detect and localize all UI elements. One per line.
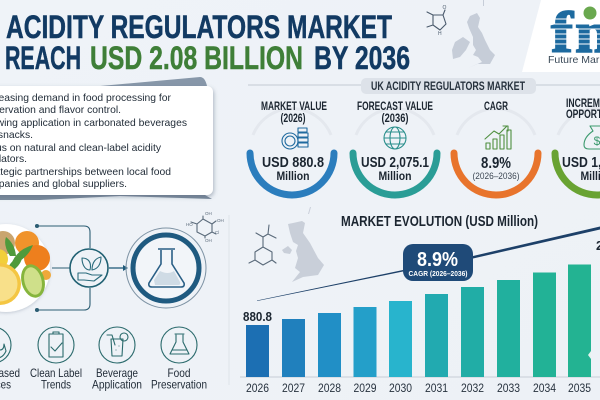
year labels: 2032 — [461, 383, 484, 395]
bar value labels — [243, 239, 600, 324]
bar chart — [240, 239, 600, 395]
year labels: 2030 — [389, 383, 412, 395]
KPI: forecast value: USD 2,075.1 — [361, 155, 429, 171]
title: BY 2036 — [314, 40, 410, 76]
icon: flask circle — [126, 228, 206, 308]
year labels: 2031 — [425, 383, 448, 395]
CAGR callout: CAGR (2026–2036) — [408, 269, 468, 278]
title: USD 2.08 BILLION — [90, 40, 303, 76]
icon labels: Trends — [41, 378, 71, 392]
KPI: forecast value: Million — [378, 171, 412, 183]
chart title: MARKET EVOLUTION (USD Million) — [341, 213, 538, 230]
icon: molecule left — [186, 211, 224, 243]
icon labels: Preservation — [151, 378, 207, 392]
icon: UK map chart — [282, 207, 324, 282]
KPI: CAGR — [454, 101, 538, 195]
divider — [228, 215, 230, 385]
KPI: market value: USD 880.8 — [262, 155, 324, 171]
year labels — [246, 383, 591, 395]
year labels: 2026 — [246, 383, 269, 395]
icon: UK map top — [452, 0, 495, 68]
year labels: 2035 — [568, 383, 591, 395]
title: ACIDITY REGULATORS MARKET — [6, 9, 392, 45]
icon: growth chart — [485, 126, 511, 149]
fruit image — [0, 224, 51, 312]
icon: coins — [282, 128, 308, 149]
icon: molecule left: OH — [205, 238, 212, 243]
KPI: market value — [250, 101, 334, 195]
icon: hand with plant — [70, 249, 108, 287]
icon: molecule left: Cl — [215, 230, 219, 235]
logo — [522, 0, 600, 72]
year labels: 2034 — [533, 383, 557, 395]
icon labels: Clean Label — [30, 366, 82, 380]
KPI: CAGR: CAGR — [484, 101, 508, 113]
title: REACH — [5, 40, 81, 76]
KPI: forecast value: (2036) — [382, 113, 409, 125]
logo letters — [551, 0, 600, 65]
KPI: market value: Million — [276, 171, 310, 183]
icon: molecule left: OH — [217, 218, 224, 223]
bullet panel — [0, 77, 213, 200]
KPI: market value: MARKET VALUE — [261, 101, 327, 113]
KPI: forecast value: FORECAST VALUE — [357, 101, 433, 113]
trend line — [257, 226, 600, 301]
icon: molecule left: HO — [186, 222, 193, 227]
bar value labels: 880.8 — [243, 310, 272, 324]
icon: molecule top — [427, 5, 446, 37]
CAGR callout — [403, 244, 473, 281]
icon labels: Beverage — [96, 366, 138, 380]
section heading: UK market: UK ACIDITY REGULATORS MARKET — [371, 79, 525, 93]
icon: molecule top: O — [442, 5, 446, 11]
KPI: market value: (2026) — [280, 113, 306, 125]
KPI: CAGR: 8.9% — [481, 155, 511, 172]
arrow — [109, 265, 128, 271]
icon: beverage — [99, 327, 135, 363]
section heading: UK market — [248, 78, 600, 94]
KPI: forecast value — [353, 101, 437, 195]
icon labels: Application — [92, 378, 142, 392]
icon: plant-based circle — [0, 327, 11, 363]
icon: molecule right — [249, 225, 276, 265]
icon labels — [0, 366, 207, 392]
connector lines — [36, 224, 90, 312]
year labels: 2029 — [354, 383, 376, 395]
title — [0, 9, 410, 76]
KPI: CAGR: (2026–2036) — [472, 171, 520, 182]
CAGR callout: 8.9% — [417, 249, 458, 271]
icon: food preservation — [161, 327, 197, 363]
icon: clean label — [38, 327, 74, 363]
icon: molecule left: OH — [205, 211, 212, 216]
year labels: 2027 — [282, 383, 305, 395]
year labels: 2033 — [497, 383, 520, 395]
icon labels: Food — [168, 366, 190, 380]
year labels: 2028 — [318, 383, 341, 395]
icon: molecule top: H — [438, 31, 442, 37]
icon: globe — [384, 127, 406, 149]
logo letters: f — [551, 0, 574, 65]
KPI: incremental opportunity — [555, 98, 600, 195]
bullet text — [0, 93, 187, 190]
